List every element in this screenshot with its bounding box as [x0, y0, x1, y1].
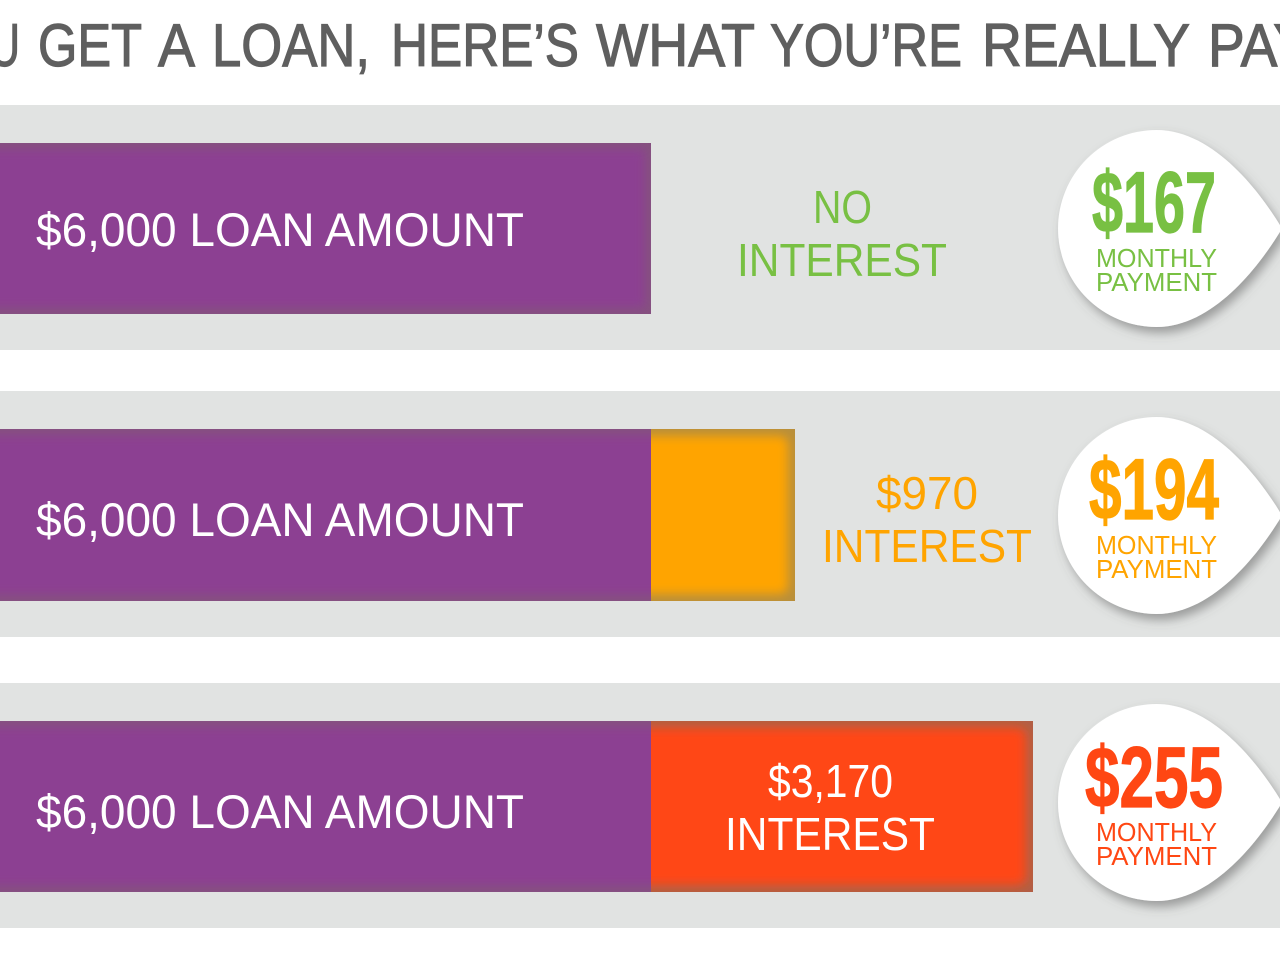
bar: loan amount: $6,000 LOAN AMOUNT — [36, 493, 524, 546]
callout: monthly payment 167: MONTHLY — [1096, 243, 1217, 273]
callout: monthly payment 167: PAYMENT — [1096, 267, 1217, 297]
callout: monthly payment 255: MONTHLY — [1096, 817, 1217, 847]
title — [0, 12, 1280, 79]
callout: monthly payment 167: $167 — [1092, 155, 1216, 251]
bar: loan amount — [0, 721, 670, 892]
label: 3170 interest: INTEREST — [725, 808, 935, 860]
panel: 3170 interest loan — [0, 683, 1280, 928]
title: YOU’RE — [770, 12, 962, 79]
callout: monthly payment 255: $255 — [1085, 730, 1223, 826]
label: no interest — [737, 181, 947, 286]
label: 3170 interest: $3,170 — [768, 755, 893, 807]
callout: monthly payment 194: MONTHLY — [1096, 530, 1217, 560]
bar: loan amount — [0, 143, 652, 314]
title: LOAN, — [212, 12, 370, 79]
label: 970 interest: INTEREST — [822, 520, 1032, 572]
callout: monthly payment 194 — [1058, 417, 1280, 614]
bar: interest — [630, 721, 1033, 892]
label: no interest: NO — [813, 181, 872, 233]
title: HERE’S — [391, 12, 579, 79]
bar: loan amount: $6,000 LOAN AMOUNT — [36, 785, 524, 838]
title: WHAT — [596, 12, 755, 79]
callout: monthly payment 255 — [1058, 704, 1280, 901]
title: REALLY — [982, 12, 1190, 79]
bar: loan amount — [0, 429, 670, 601]
label: 970 interest: $970 — [876, 467, 978, 519]
callout: monthly payment 167 — [1058, 130, 1280, 327]
bar: loan amount: $6,000 LOAN AMOUNT — [36, 203, 524, 256]
callout: monthly payment 255: PAYMENT — [1096, 841, 1217, 871]
panel: 970 interest loan — [0, 391, 1280, 637]
title: A — [158, 12, 195, 79]
title: GET — [38, 12, 142, 79]
panel: no interest loan — [0, 105, 1280, 350]
bar: interest — [651, 429, 795, 601]
label: 970 interest — [822, 467, 1032, 572]
label: no interest: INTEREST — [737, 234, 947, 286]
callout: monthly payment 194: PAYMENT — [1096, 554, 1217, 584]
callout: monthly payment 194: $194 — [1089, 442, 1219, 538]
label: 3170 interest — [725, 755, 935, 860]
